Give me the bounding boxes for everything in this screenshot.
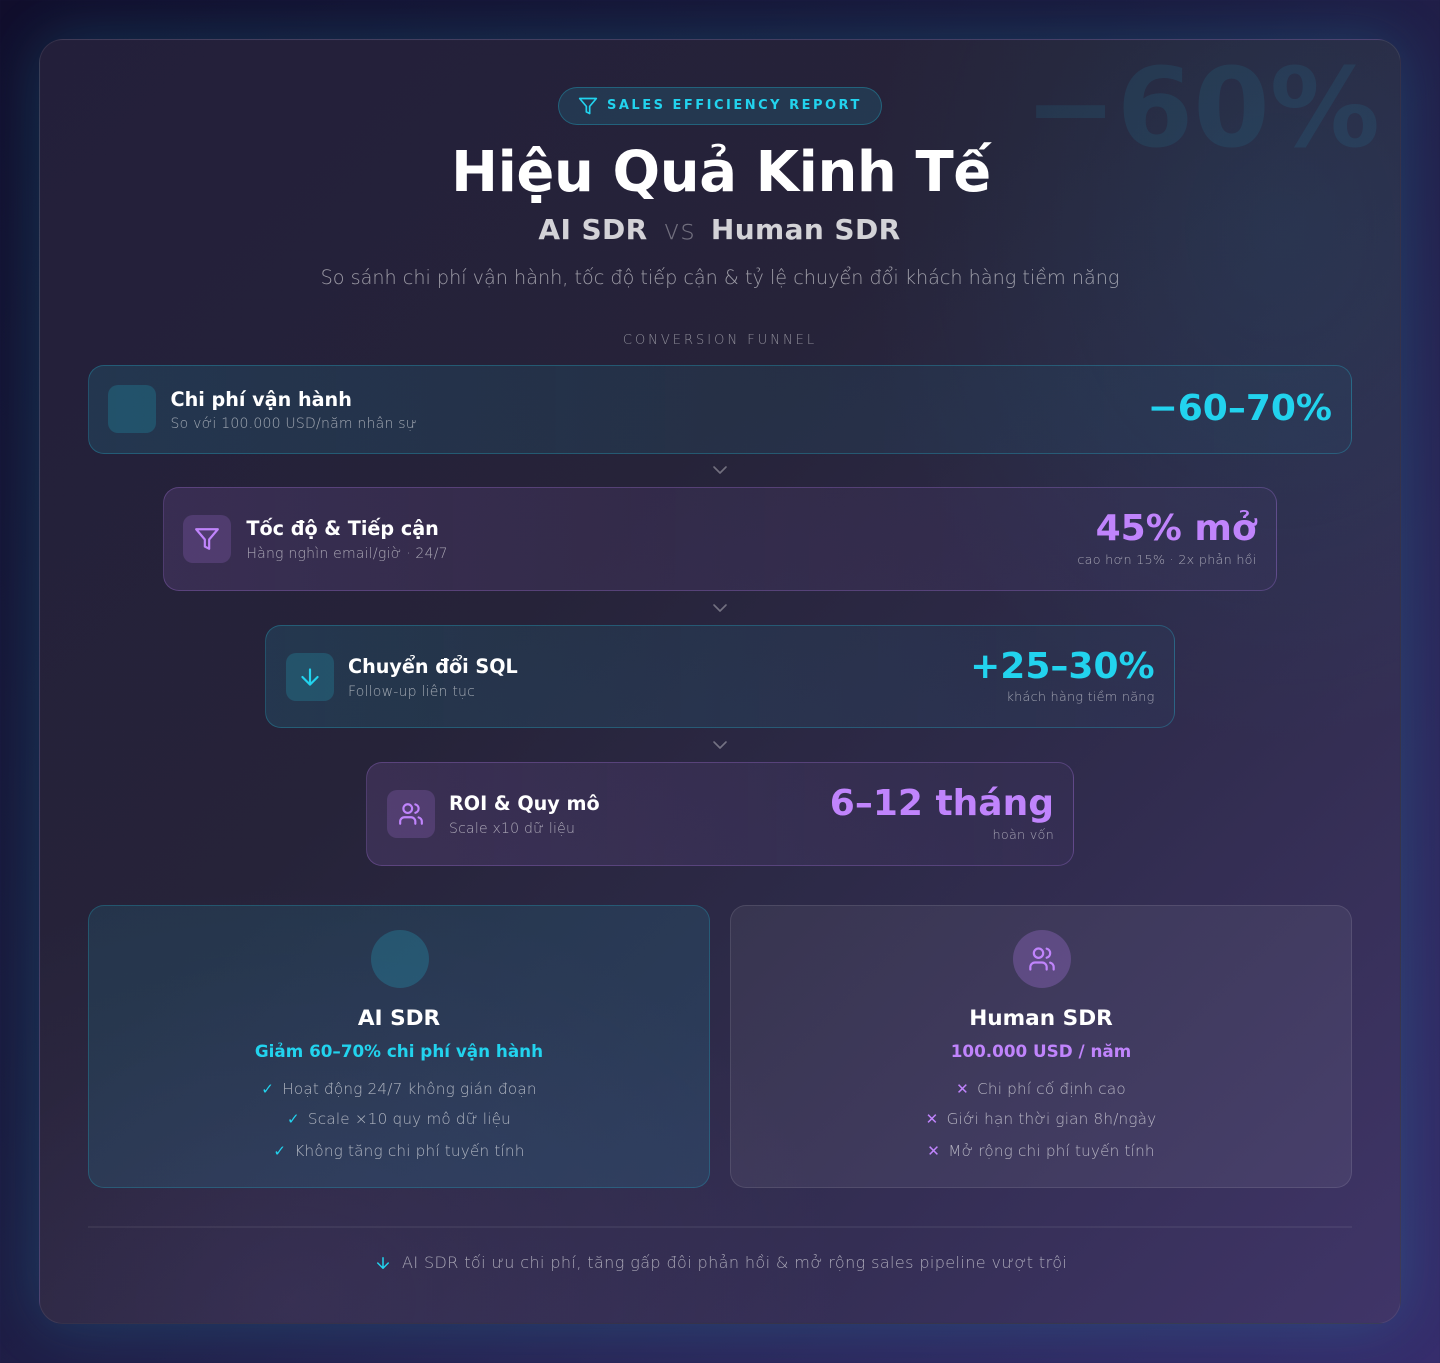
row value: +25–30% [970, 646, 1155, 687]
row value: 6–12 tháng [830, 783, 1054, 824]
funnel row 1: operating cost [88, 365, 1352, 454]
row description: Follow-up liên tục [348, 684, 475, 700]
funnel row 3: SQL conversion [265, 625, 1175, 728]
chevron 2 [713, 604, 727, 612]
icon: arrow down [377, 1257, 389, 1269]
row title: Chuyển đổi SQL [348, 655, 518, 678]
row value note: hoàn vốn [993, 828, 1054, 843]
panel: AI SDR [88, 905, 710, 1188]
chevron 1 [713, 466, 727, 474]
panel heading: Human SDR [969, 1006, 1113, 1031]
icon tile: arrow down [286, 653, 334, 701]
row title: Chi phí vận hành [170, 388, 352, 411]
panel highlight: Giảm 60–70% chi phí vận hành [255, 1041, 543, 1061]
icon tile: empty [108, 385, 156, 433]
row value: 45% mở [1096, 508, 1257, 549]
benefit 2: ✓ Scale ×10 quy mô dữ liệu [287, 1110, 511, 1128]
chevron 3 [713, 741, 727, 749]
badge label: SALES EFFICIENCY REPORT [607, 98, 862, 113]
row title: ROI & Quy mô [449, 792, 600, 815]
benefit 1: ✓ Hoạt động 24/7 không gián đoạn [261, 1080, 537, 1098]
funnel row 2: speed and reach [163, 487, 1277, 591]
benefit 3: ✓ Không tăng chi phí tuyến tính [273, 1142, 525, 1160]
badge: sales efficiency report [558, 87, 882, 125]
row value note: cao hơn 15% · 2x phản hồi [1077, 553, 1257, 568]
row description: So với 100.000 USD/năm nhân sự [170, 416, 417, 432]
drawback 3: ✕ Mở rộng chi phí tuyến tính [927, 1142, 1155, 1160]
row description: Hàng nghìn email/giờ · 24/7 [246, 546, 448, 562]
funnel row 4: ROI and scale [366, 762, 1074, 866]
row title: Tốc độ & Tiếp cận [246, 517, 439, 540]
drawback 2: ✕ Giới hạn thời gian 8h/ngày [926, 1110, 1156, 1128]
icon: users circle [1013, 930, 1071, 988]
panel heading: AI SDR [358, 1006, 440, 1031]
subtitle: AI SDR vs Human SDR: AI SDR vs Human SDR [538, 213, 901, 246]
row value note: khách hàng tiềm năng [1006, 690, 1155, 705]
description: So sánh chi phí vận hành, tốc độ tiếp cận & tỷ lệ chuyển đổi khách hàng tiềm năng [321, 266, 1119, 289]
panel highlight: 100.000 USD / năm [951, 1041, 1131, 1061]
icon: funnel [578, 98, 598, 114]
section label: conversion funnel: CONVERSION FUNNEL [623, 333, 817, 348]
watermark: −60%: −60% [1025, 44, 1380, 172]
row description: Scale x10 dữ liệu [449, 821, 575, 837]
footer takeaway [377, 1253, 1067, 1272]
footer text: AI SDR tối ưu chi phí, tăng gấp đôi phản hồi & mở rộng sales pipeline vượt trội [402, 1253, 1067, 1272]
panel: Human SDR [730, 905, 1352, 1188]
icon tile: users [387, 790, 435, 838]
icon: empty circle [371, 930, 429, 988]
title: Hiệu Quả Kinh Tế [451, 140, 991, 205]
drawback 1: ✕ Chi phí cố định cao [956, 1080, 1126, 1098]
row value: −60–70% [1148, 388, 1332, 429]
icon tile: funnel [183, 515, 231, 563]
